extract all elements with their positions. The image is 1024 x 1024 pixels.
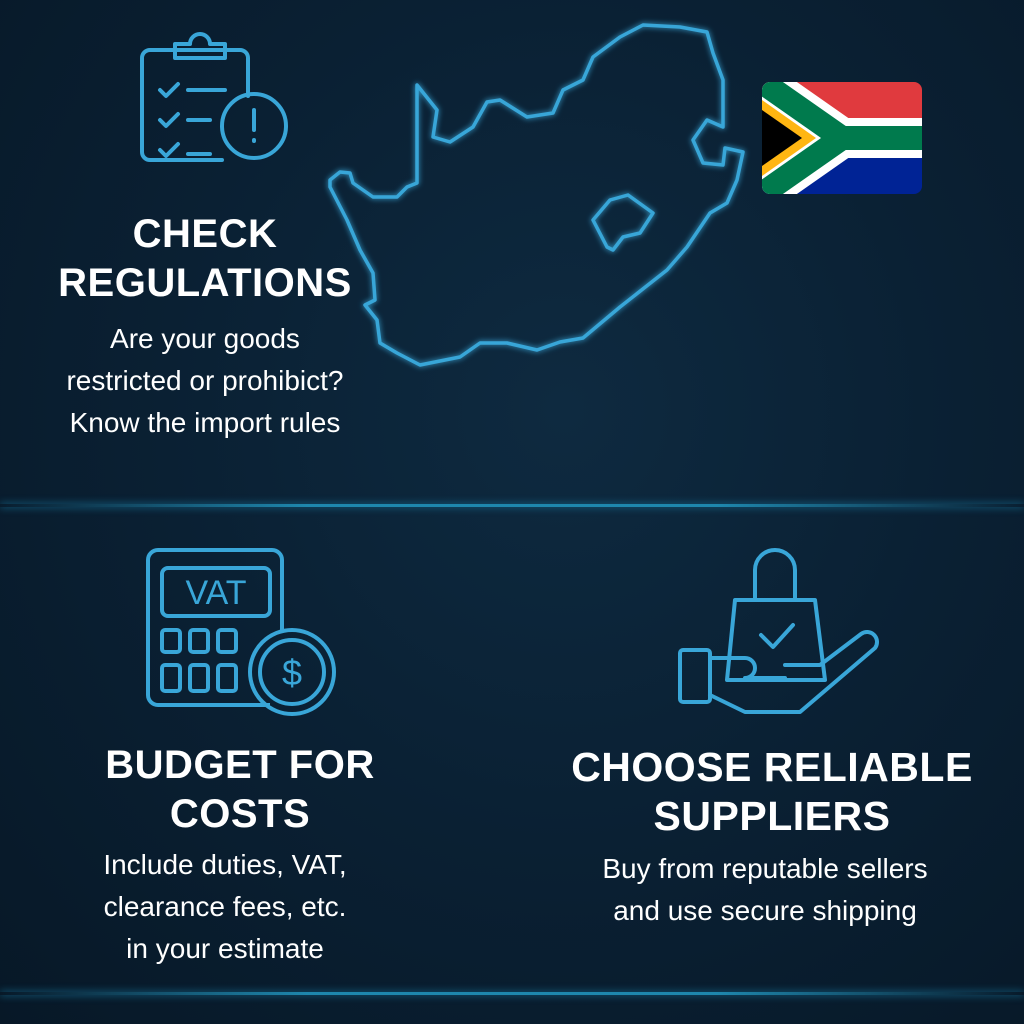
text: budget body [103,849,347,964]
text: budget body: in your estimate [126,933,324,964]
text: regulations body [66,323,344,438]
icon: hand with shopping bag [678,548,879,714]
heading: choose reliable suppliers [571,744,973,839]
heading: budget for costs: BUDGET FOR [105,743,375,787]
icon: clipboard with alert [140,32,288,162]
heading: budget for costs [105,743,375,836]
text: regulations body: Know the import rules [70,407,340,438]
heading: choose reliable suppliers: SUPPLIERS [654,793,890,839]
text: budget body: Include duties, VAT, [103,849,347,880]
text: budget body: clearance fees, etc. [104,891,346,922]
text: suppliers body: Buy from reputable sellers [602,853,928,884]
icon: VAT calculator [146,548,336,716]
heading: budget for costs: COSTS [170,792,310,836]
icon: VAT calculator: VAT [185,574,247,612]
text: suppliers body: and use secure shipping [613,895,917,926]
flag: South Africa [762,82,922,194]
text: regulations body: Are your goods [110,323,300,354]
icon: VAT calculator: $ [282,652,302,693]
heading: check regulations: CHECK [133,212,277,256]
heading: check regulations: REGULATIONS [58,261,352,305]
heading: check regulations [58,212,352,305]
text: regulations body: restricted or prohibict? [66,365,344,396]
text: suppliers body [602,853,928,926]
heading: choose reliable suppliers: CHOOSE RELIABLE [571,744,973,790]
